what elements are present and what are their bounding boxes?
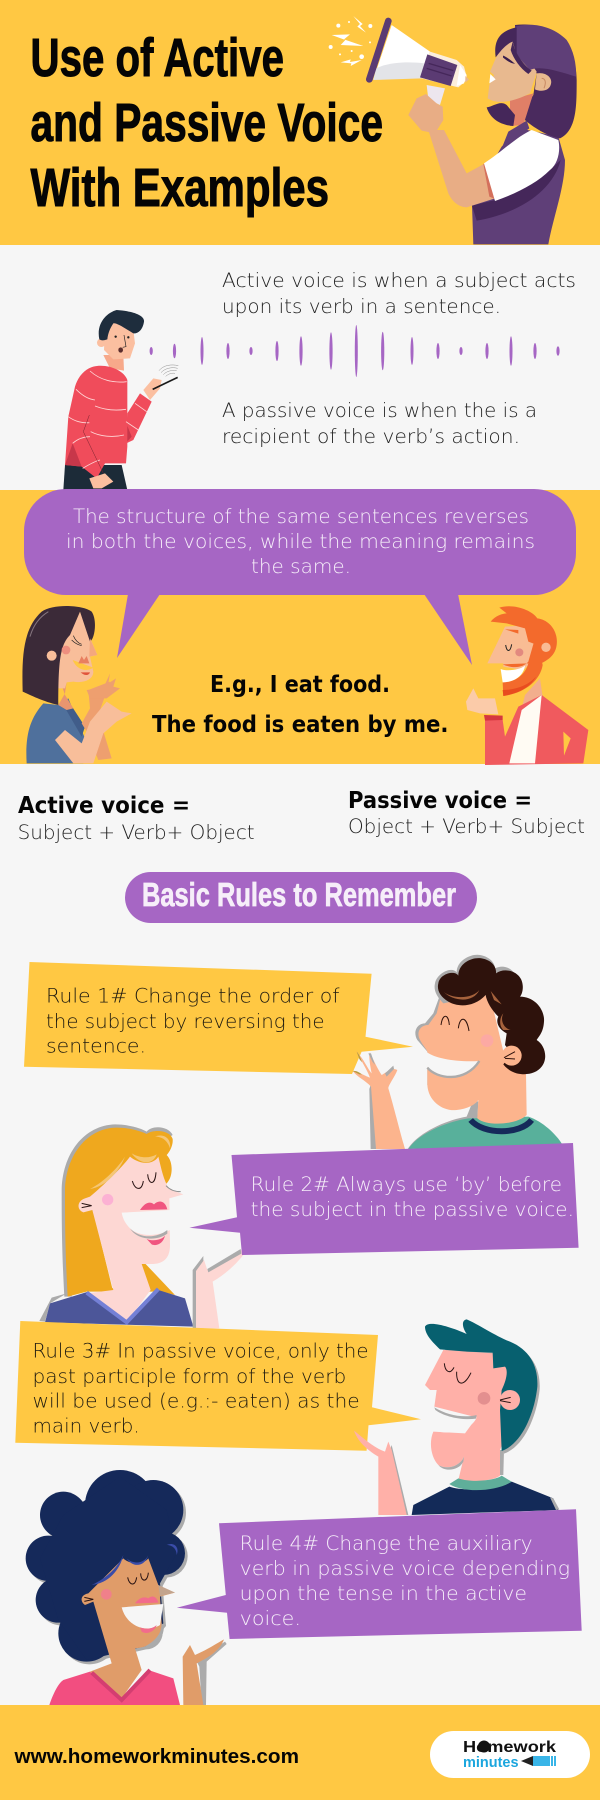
text: passive voice formula	[348, 788, 585, 838]
speech bubble: The structure of the same sentences reverses	[73, 505, 529, 528]
text: active voice definition: Active voice is when a subject acts	[222, 269, 576, 292]
text: active voice formula	[18, 793, 255, 844]
panel: definitions	[63, 269, 576, 490]
icon: blonde woman	[39, 1124, 243, 1328]
icon: woman with megaphone	[329, 16, 577, 244]
panel: formulas	[18, 788, 585, 844]
icon: curly haired man	[353, 955, 563, 1149]
speech bubble: in both the voices, while the meaning remains	[66, 530, 535, 553]
text: example sentences: The food is eaten by me.	[152, 712, 448, 738]
icon: rule 4 speech bubble	[177, 1509, 582, 1639]
heading: basic rules: Basic Rules to Remember	[142, 876, 456, 913]
text: rule 4: Rule 4# Change the auxiliary	[240, 1532, 533, 1555]
text: rule 4: voice.	[240, 1607, 301, 1630]
text: rule 2	[251, 1173, 574, 1221]
text: rule 4: verb in passive voice depending	[240, 1557, 570, 1580]
icon: rule 1 speech bubble	[24, 962, 413, 1074]
icon: woman speaking	[22, 606, 132, 763]
text: passive voice definition: A passive voice is when the is a	[222, 399, 537, 422]
title: Use of Active	[30, 28, 284, 88]
text: example sentences	[152, 672, 448, 738]
icon: teal haired man	[354, 1319, 559, 1515]
title	[30, 28, 383, 218]
text: rule 1: the subject by reversing the	[46, 1010, 324, 1033]
text: rule 4: upon the tense in the active	[240, 1582, 527, 1605]
icon: woman with curly hair	[26, 1470, 227, 1705]
title: With Examples	[30, 158, 329, 218]
icon: bearded man speaking	[466, 606, 588, 765]
text: active voice definition	[222, 269, 576, 318]
text: rule 3: will be used (e.g.:- eaten) as the	[32, 1390, 360, 1413]
text: rule 2: the subject in the passive voice.	[251, 1198, 574, 1221]
text: rule 1: sentence.	[46, 1035, 146, 1058]
text: passive voice formula: Passive voice =	[348, 788, 532, 814]
title: and Passive Voice	[30, 93, 383, 153]
heading: basic rules	[125, 872, 477, 923]
text: passive voice definition	[222, 399, 537, 448]
icon: rule 2 speech bubble	[189, 1143, 579, 1255]
text: rule 3: main verb.	[32, 1415, 140, 1438]
text: rule 1	[46, 985, 340, 1058]
text: active voice definition: upon its verb in a sentence.	[222, 295, 501, 318]
text: passive voice formula: Object + Verb+ Subject	[348, 815, 585, 838]
text: active voice formula: Active voice =	[18, 793, 190, 819]
text: example sentences: E.g., I eat food.	[210, 672, 390, 698]
icon: man with phone	[63, 310, 178, 490]
icon: homework minutes logo: minutes	[463, 1754, 518, 1771]
text: rule 3: past participle form of the verb	[32, 1365, 346, 1388]
panel: header	[0, 0, 600, 245]
text: rule 3: Rule 3# In passive voice, only the	[32, 1340, 368, 1363]
icon: rule 3 speech bubble	[15, 1321, 421, 1451]
text: rule 4	[240, 1532, 570, 1630]
text: rule 1: Rule 1# Change the order of	[46, 985, 340, 1008]
speech bubble: the same.	[251, 555, 351, 578]
panel: example band	[0, 489, 600, 765]
panel: rule 1	[24, 955, 563, 1149]
text: active voice formula: Subject + Verb+ Object	[18, 821, 255, 844]
speech bubble	[24, 489, 576, 665]
panel: rule 4	[26, 1470, 582, 1705]
text: rule 2: Rule 2# Always use ‘by’ before	[251, 1173, 562, 1196]
panel: rule 2	[39, 1124, 579, 1328]
panel: rule 3	[15, 1319, 559, 1515]
text: rule 3	[32, 1340, 368, 1438]
chart: voice waveform	[150, 325, 560, 377]
icon: homework minutes logo: Homework	[463, 1739, 556, 1756]
text: website url: www.homeworkminutes.com	[13, 1745, 299, 1768]
icon: homework minutes logo	[430, 1731, 590, 1778]
panel: footer	[0, 1705, 600, 1800]
text: passive voice definition: recipient of the verb’s action.	[222, 425, 520, 448]
